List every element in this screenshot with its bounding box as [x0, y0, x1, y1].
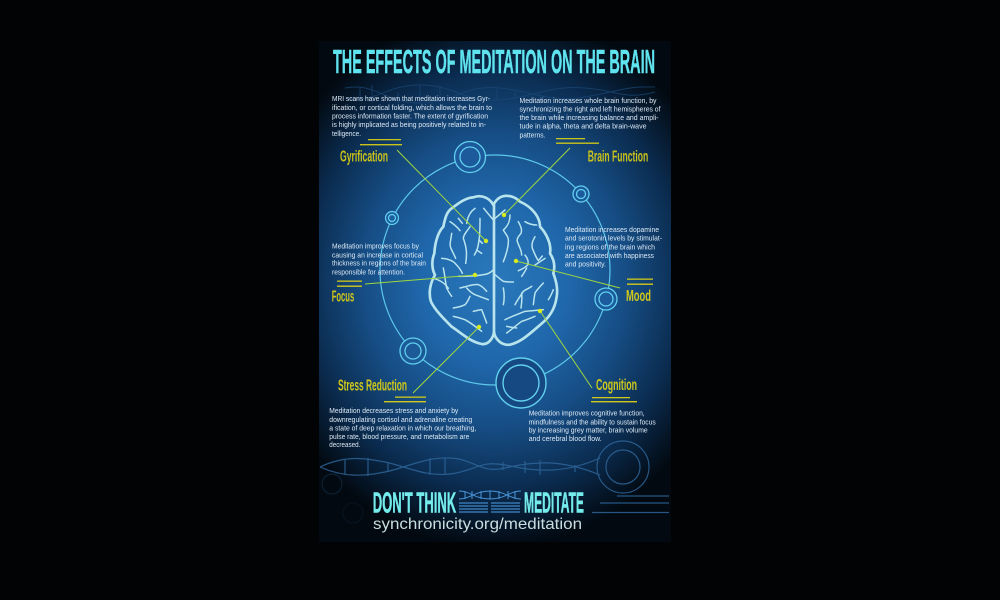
- ring: top: [454, 142, 486, 172]
- label: cognition: [591, 377, 637, 402]
- label: focus: [332, 280, 362, 306]
- website url: synchronicity.org/meditation: [373, 516, 582, 533]
- poster content: [320, 43, 669, 533]
- ring: upper right: [573, 186, 589, 202]
- text block: cognition: Meditation improves cognitive function,: [529, 409, 645, 418]
- dna strand and rings: bottom background: [320, 441, 669, 523]
- footer slogan: DON'T THINK: [373, 488, 456, 520]
- text block: stress reduction: pulse rate, blood pressure, and metabolism are: [329, 432, 469, 441]
- label: brain function: Brain Function: [588, 148, 648, 166]
- text block: gyrification: MRI scans have shown that meditation increases Gyr-: [332, 94, 490, 103]
- text block: gyrification: is highly implicated as being positively related to in-: [332, 120, 486, 129]
- orbit circle with rings: [380, 142, 617, 408]
- text block: brain function: tude in alpha, theta and delta brain-wave: [520, 122, 646, 131]
- ring: bottom: [496, 358, 546, 408]
- text block: brain function: [520, 96, 661, 140]
- label: gyrification: [340, 139, 402, 166]
- text block: focus: Meditation improves focus by: [332, 242, 419, 250]
- text block: mood: and positivity.: [565, 260, 606, 269]
- callout: stress reduction: [413, 325, 481, 393]
- ring: lower left: [400, 338, 426, 364]
- text block: gyrification: ification, or cortical folding, which allows the brain to: [332, 103, 492, 112]
- text block: focus: responsible for attention.: [332, 268, 405, 277]
- brain folds: [433, 208, 553, 333]
- label: focus: Focus: [332, 289, 354, 306]
- label: cognition: Cognition: [596, 377, 637, 394]
- text block: cognition: mindfulness and the ability to sustain focus: [529, 417, 656, 426]
- text block: stress reduction: a state of deep relaxation in which our breathing,: [329, 424, 476, 433]
- text block: stress reduction: Meditation decreases stress and anxiety by: [329, 406, 458, 415]
- label: stress reduction: [338, 378, 426, 402]
- text block: mood: [565, 225, 662, 269]
- text block: stress reduction: decreased.: [329, 440, 360, 449]
- text block: brain function: Meditation increases whole brain function, by: [520, 96, 657, 105]
- text block: cognition: and cerebral blood flow.: [529, 434, 602, 443]
- ring: right: [595, 288, 617, 310]
- callout: brain function: [502, 148, 570, 217]
- callout: focus: [365, 273, 477, 284]
- text block: focus: [332, 242, 426, 277]
- label: mood: Mood: [626, 288, 651, 305]
- text block: cognition: [529, 409, 656, 443]
- brain illustration: [430, 196, 557, 345]
- label: mood: [626, 278, 653, 305]
- text block: gyrification: process information faster. The extent of gyrification: [332, 112, 488, 120]
- label: brain function: [556, 138, 648, 166]
- text block: focus: thickness in regions of the brain: [332, 259, 426, 268]
- icon: dna with stripes: [459, 491, 521, 512]
- text block: stress reduction: [329, 406, 476, 449]
- text block: gyrification: telligence.: [332, 129, 361, 138]
- text block: mood: ing regions of the brain which: [565, 242, 655, 251]
- text block: mood: are associated with happiness: [565, 251, 654, 260]
- callout lines and dots: [365, 148, 620, 393]
- text block: focus: causing an increase in cortical: [332, 250, 423, 259]
- text block: mood: and serotonin levels by stimulat-: [565, 234, 662, 243]
- brain outline and midline: [430, 196, 557, 345]
- text block: stress reduction: downregulating cortisol and adrenaline creating: [329, 415, 472, 424]
- text block: gyrification: [332, 94, 492, 138]
- dna strand: top background: [345, 85, 655, 103]
- callout: cognition: [538, 309, 592, 388]
- callout: gyrification: [397, 150, 488, 243]
- poster background: [319, 41, 671, 542]
- text block: brain function: synchronizing the right and left hemispheres of: [520, 104, 661, 114]
- ring: left: [386, 212, 398, 224]
- poster content: MEDITATE: [524, 488, 584, 520]
- callout: mood: [514, 259, 620, 288]
- footer slogan: [373, 488, 584, 533]
- text block: brain function: patterns.: [520, 130, 546, 140]
- text block: brain function: the brain while increasing balance and ampli-: [520, 113, 659, 122]
- text block: mood: Meditation increases dopamine: [565, 225, 659, 234]
- label: gyrification: Gyrification: [340, 148, 388, 166]
- text block: cognition: by increasing grey matter, brain volume: [529, 426, 648, 435]
- label: stress reduction: Stress Reduction: [338, 378, 407, 395]
